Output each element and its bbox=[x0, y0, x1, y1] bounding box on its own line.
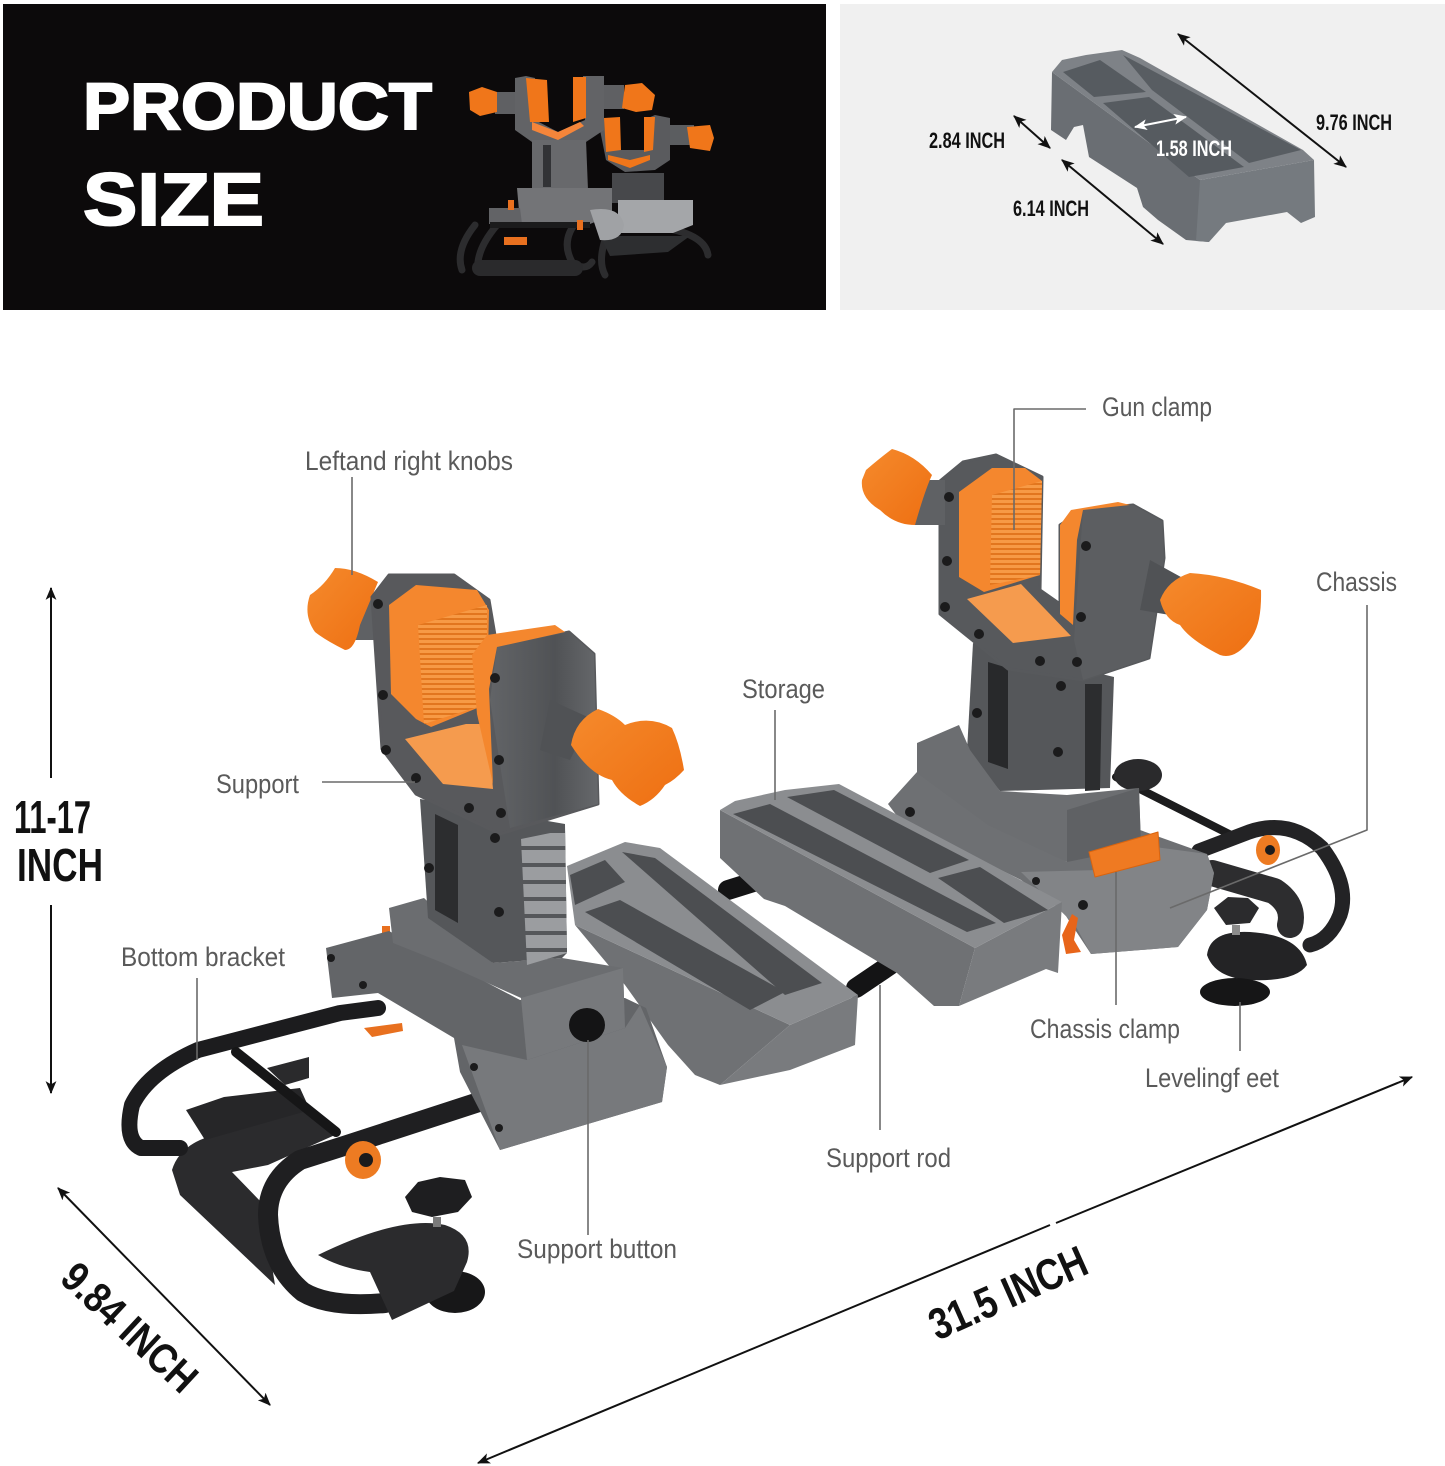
label: left and right knobs: Leftand right knobs bbox=[305, 446, 513, 476]
arrow: 1.58 inch bbox=[1135, 117, 1186, 127]
support button bbox=[569, 1008, 605, 1042]
label: chassis clamp: Chassis clamp bbox=[1030, 1014, 1180, 1044]
pad bbox=[389, 585, 489, 727]
arrow: 9.76 inch bbox=[1178, 34, 1346, 167]
label: leveling feet bbox=[1145, 1002, 1279, 1093]
right knob stem and knob bbox=[1140, 560, 1190, 615]
icon: chassis clamp bbox=[1089, 832, 1160, 877]
panel: storage tray dimensions bbox=[840, 4, 1445, 310]
upper base bbox=[917, 725, 1141, 862]
orange bolt bbox=[345, 1141, 381, 1179]
title: product size: SIZE bbox=[83, 158, 264, 241]
product: center storage tray bbox=[720, 784, 1062, 1006]
front bar bbox=[268, 1100, 485, 1304]
arrow: 2.84 inch bbox=[1014, 116, 1050, 148]
label: storage: Storage bbox=[742, 674, 825, 704]
star knob bbox=[405, 1177, 472, 1217]
lower plate bbox=[326, 931, 667, 1150]
screws bbox=[327, 599, 506, 1132]
rear rod and loop bbox=[1116, 777, 1237, 838]
icon: small product photo bbox=[460, 76, 714, 275]
product: right support assembly bbox=[862, 449, 1343, 1006]
product: connecting support rods bbox=[728, 880, 890, 988]
dimension: width 9.84 inch: 9.84 INCH bbox=[52, 1253, 207, 1402]
label: 1.58 inch: 1.58 INCH bbox=[1156, 136, 1232, 161]
rear rod loop bbox=[129, 1008, 378, 1148]
label: gun clamp: Gun clamp bbox=[1102, 392, 1212, 422]
label: 9.76 inch: 9.76 INCH bbox=[1316, 110, 1392, 135]
label: support: Support bbox=[216, 769, 299, 799]
label: 6.14 inch: 6.14 INCH bbox=[1013, 196, 1089, 221]
cross bar bbox=[236, 1052, 336, 1132]
icon: leveling foot bbox=[1200, 897, 1307, 1006]
product: left support assembly bbox=[129, 568, 684, 1320]
panel: product size header bbox=[3, 4, 826, 310]
label: storage bbox=[742, 674, 825, 800]
title: product size bbox=[83, 69, 432, 241]
label: support button: Support button bbox=[517, 1234, 677, 1264]
dimension: length 31.5 inch bbox=[478, 1077, 1412, 1463]
right head bbox=[940, 455, 1164, 680]
icon: storage tray bbox=[1051, 50, 1315, 242]
product: left storage tray bbox=[567, 842, 858, 1085]
orange seat bbox=[967, 584, 1071, 643]
label: chassis: Chassis bbox=[1316, 567, 1397, 597]
label: leveling feet: Levelingf eet bbox=[1145, 1063, 1279, 1093]
tower pillar bbox=[967, 643, 1114, 791]
orange pad bbox=[959, 468, 1042, 592]
dimension: length 31.5 inch: 31.5 INCH bbox=[922, 1237, 1095, 1350]
orange tabs bbox=[364, 1023, 403, 1037]
label: gun clamp bbox=[1014, 392, 1212, 530]
seat bbox=[405, 724, 493, 789]
label: bottom bracket: Bottom bracket bbox=[121, 942, 285, 972]
orange strip bbox=[1060, 502, 1130, 625]
title: product size: PRODUCT bbox=[83, 69, 432, 143]
label: chassis bbox=[1170, 567, 1397, 908]
right knob bbox=[540, 700, 590, 760]
dimension: height 11-17 inch: 11-17 bbox=[14, 791, 91, 843]
screws bbox=[905, 492, 1091, 910]
arrow: 6.14 inch bbox=[1062, 160, 1163, 244]
head bbox=[372, 575, 598, 834]
rear rubber handle bbox=[172, 1100, 335, 1285]
label: 2.84 inch: 2.84 INCH bbox=[929, 128, 1005, 153]
strip bbox=[472, 625, 565, 784]
dimension: height 11-17 inch: INCH bbox=[17, 839, 103, 891]
left knob bbox=[915, 480, 945, 525]
left knob bbox=[350, 595, 380, 640]
dimension: width 9.84 inch bbox=[52, 1188, 270, 1405]
dimension: height 11-17 inch bbox=[14, 588, 103, 1093]
pillar bbox=[420, 799, 567, 963]
label: support rod: Support rod bbox=[826, 1143, 951, 1173]
front foot bbox=[425, 1271, 485, 1313]
chassis bbox=[888, 772, 1214, 954]
rack bbox=[521, 830, 567, 965]
upper base bbox=[389, 898, 625, 1060]
orange sliver clamp bbox=[1062, 914, 1081, 954]
